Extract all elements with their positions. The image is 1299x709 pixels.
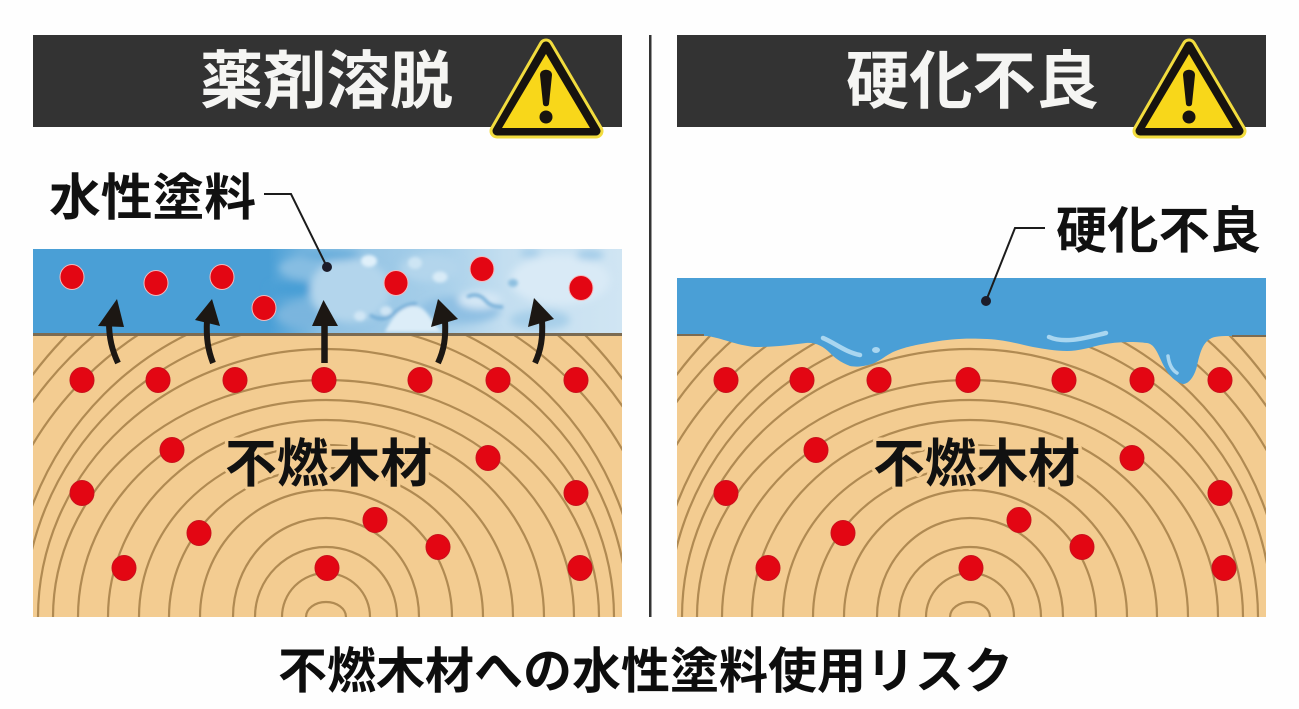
callout: 硬化不良 bbox=[981, 203, 1261, 306]
caption: 不燃木材への水性塗料使用リスク: 不燃木材への水性塗料使用リスク bbox=[278, 645, 1013, 699]
header bar: 硬化不良 bbox=[677, 35, 1266, 127]
callout: 硬化不良: 硬化不良 bbox=[1056, 203, 1261, 259]
red chemical dots in wood bbox=[714, 368, 1236, 580]
label: 不燃木材: 不燃木材 bbox=[225, 436, 432, 494]
uncured paint layer with drips bbox=[677, 278, 1266, 384]
header bar: 薬剤溶脱 bbox=[33, 35, 622, 127]
callout: 水性塗料 bbox=[49, 170, 332, 272]
red chemical dots in wood bbox=[70, 368, 592, 580]
icon: warning triangle bbox=[1140, 46, 1239, 131]
heading: 薬剤溶脱: 薬剤溶脱 bbox=[200, 47, 453, 117]
arrows: chemicals migrating upward bbox=[98, 298, 554, 363]
wood substrate bbox=[677, 336, 1266, 617]
water-based paint layer, leaching bbox=[33, 249, 622, 334]
paint / wood boundary bbox=[33, 333, 622, 336]
migrating red chemical dots in paint bbox=[60, 256, 593, 320]
divider bbox=[649, 35, 652, 617]
panel: 硬化不良 (right) bbox=[677, 35, 1266, 617]
heading: 硬化不良: 硬化不良 bbox=[846, 47, 1099, 117]
panel: 薬剤溶脱 (left) bbox=[0, 35, 699, 617]
label: 不燃木材: 不燃木材 bbox=[873, 436, 1080, 494]
icon: warning triangle bbox=[497, 46, 596, 131]
callout: 水性塗料: 水性塗料 bbox=[49, 170, 256, 226]
wood substrate bbox=[33, 336, 622, 617]
